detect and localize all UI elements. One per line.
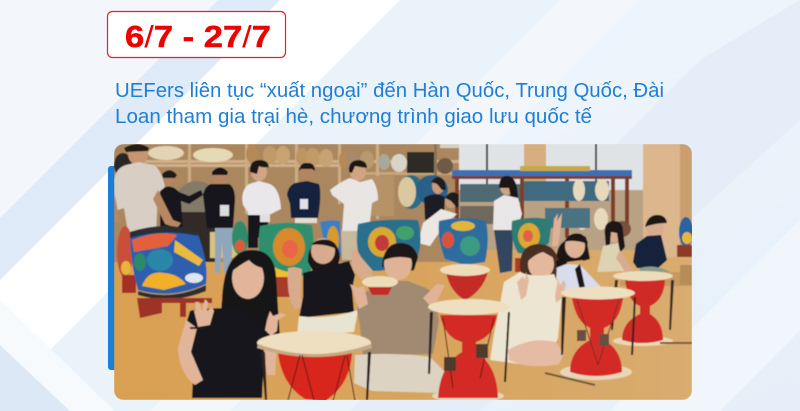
standing and kneeling students, centre group (418, 176, 522, 273)
seated student in brown blouse (350, 243, 446, 393)
headline text: Loan tham gia trại hè, chương trình giao lưu quốc tế (115, 106, 592, 128)
red drum, centre (428, 299, 510, 402)
seated student in cream dress (490, 244, 566, 366)
headline text: UEFers liên tục “xuất ngoại” đến Hàn Quốc, Trung Quốc, Đài (115, 80, 664, 102)
small red drum, back (362, 264, 490, 300)
red drum, centre right (545, 286, 636, 385)
red drum, far right (611, 271, 692, 346)
headline text (115, 80, 664, 128)
date badge: 6/7 - 27 /7 (125, 19, 271, 54)
photo: students with drums (114, 143, 693, 402)
date badge (108, 12, 286, 58)
blue accent bar (108, 166, 118, 370)
red drum, foreground left (257, 331, 372, 401)
standing students, left group (114, 143, 378, 273)
drum rack (398, 166, 632, 238)
painted drums (117, 217, 693, 318)
seated student in black dress (288, 238, 373, 336)
seated student in black top, foreground (178, 250, 286, 398)
back row seated students (552, 213, 692, 295)
wooden shelves (114, 144, 459, 262)
room background (114, 144, 692, 400)
